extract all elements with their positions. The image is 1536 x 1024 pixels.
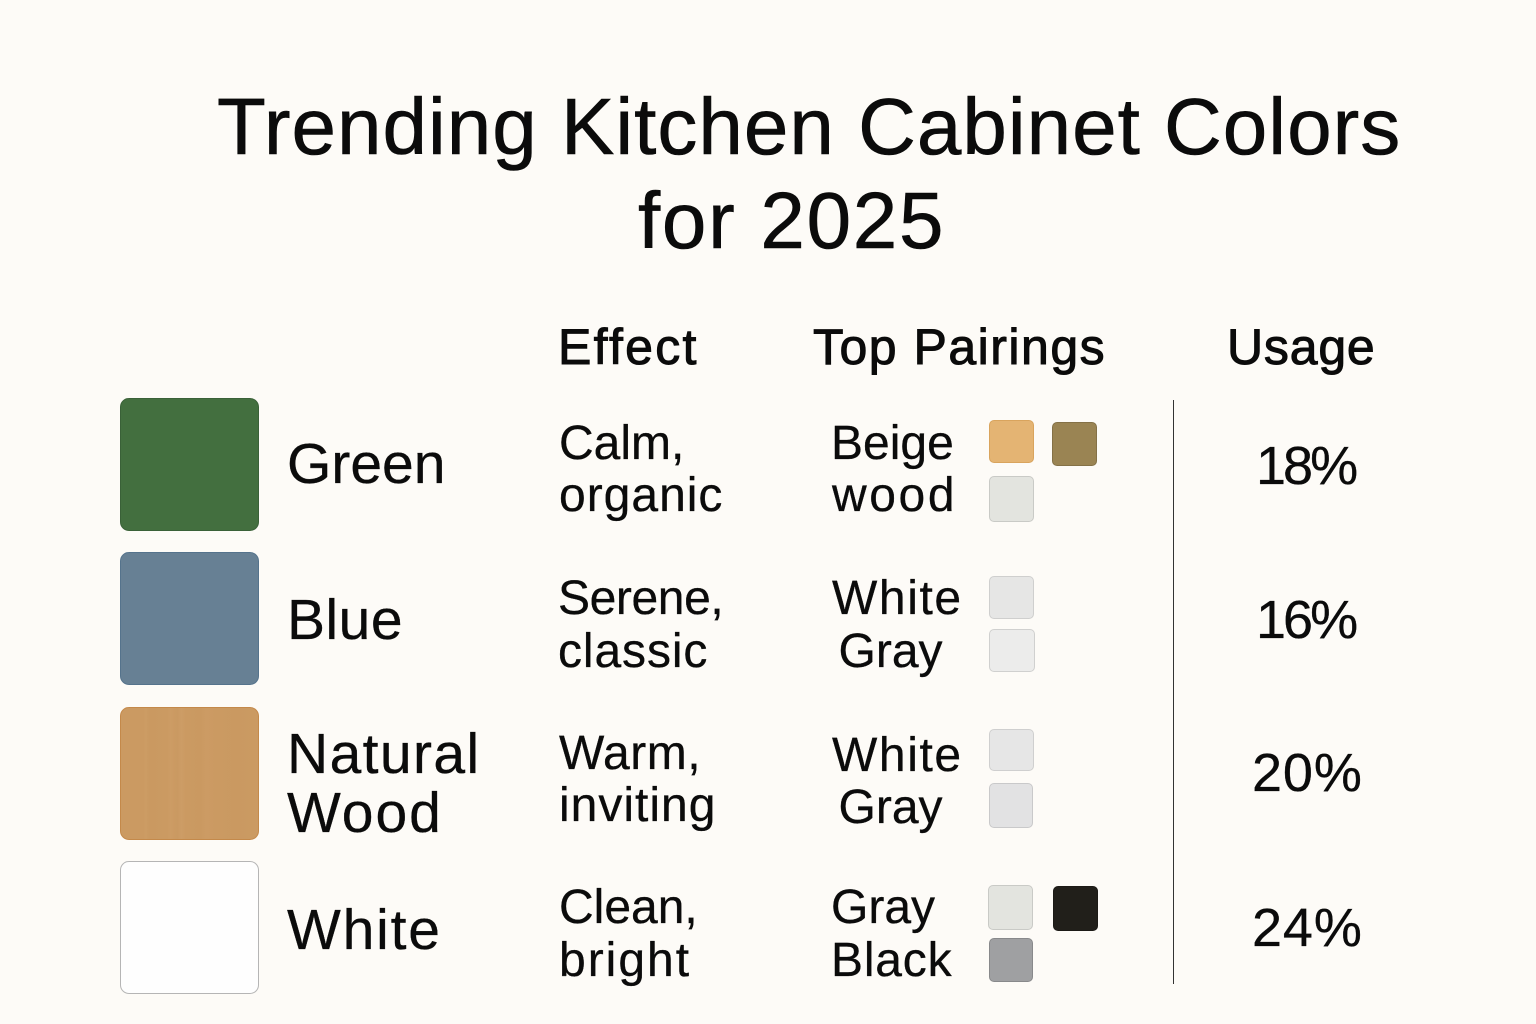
effect: warm, inviting [559,727,716,832]
effect: serene, classic: Serene, [558,572,723,625]
pairings: white gray: Gray [838,781,943,834]
pairings: beige wood: wood [832,469,957,522]
title: Trending Kitchen Cabinet Colors [217,82,1401,171]
pairing swatch: black [1053,886,1098,931]
usage: 18%: 18% [1256,436,1355,496]
pairing swatch: white [989,729,1034,771]
pairing swatch: light gray [988,885,1033,930]
label: white: White [287,898,442,962]
effect: clean, bright: Clean, [559,881,698,934]
row: green [120,398,1356,531]
pairings: beige wood [831,417,957,522]
pairings: white gray: White [832,572,963,625]
pairings: gray black: Gray [831,881,935,934]
pairing swatch: brown [1052,422,1097,466]
row: blue [120,552,1356,685]
swatch: blue [120,552,259,685]
usage: 24%: 24% [1252,898,1363,958]
column heading: top pairings: Top Pairings [813,319,1106,375]
effect: warm, inviting: inviting [559,779,716,832]
column heading: usage: Usage [1227,319,1376,375]
pairing swatch: gray [989,629,1035,672]
label: natural wood: Natural [287,722,481,786]
pairings: gray black: Black [831,934,952,987]
label: natural wood: Wood [287,781,443,845]
pairing swatch: gray [989,783,1033,828]
title [217,82,1401,265]
pairing swatch: mid gray [989,938,1033,982]
effect: warm, inviting: Warm, [559,727,701,780]
pairing swatch: white [989,576,1034,619]
pairing swatch: light gray [989,476,1034,522]
usage: 20%: 20% [1252,743,1363,803]
label: natural wood [287,722,481,845]
effect: calm, organic: Calm, [559,417,684,470]
swatch: natural wood [120,707,259,840]
effect: clean, bright: bright [559,934,691,987]
pairings: white gray [832,729,963,834]
effect: serene, classic: classic [558,625,708,678]
pairing swatch: tan [989,420,1034,463]
effect: calm, organic [559,417,723,522]
usage: 16%: 16% [1256,590,1355,650]
title: for 2025 [638,176,945,265]
label: blue: Blue [287,588,403,652]
pairings: gray black [831,881,952,987]
effect: calm, organic: organic [559,469,723,522]
label: green: Green [287,432,445,496]
effect: clean, bright [559,881,698,987]
pairings: white gray: Gray [838,625,943,678]
swatch: green [120,398,259,531]
pairings: beige wood: Beige [831,417,954,470]
column heading: effect: Effect [558,319,699,375]
row: white [120,861,1363,994]
vertical divider [1173,400,1174,984]
pairings: white gray [832,572,963,678]
row: natural wood [120,707,1363,845]
swatch: white [120,861,259,994]
effect: serene, classic [558,572,723,678]
pairings: white gray: White [832,729,963,782]
